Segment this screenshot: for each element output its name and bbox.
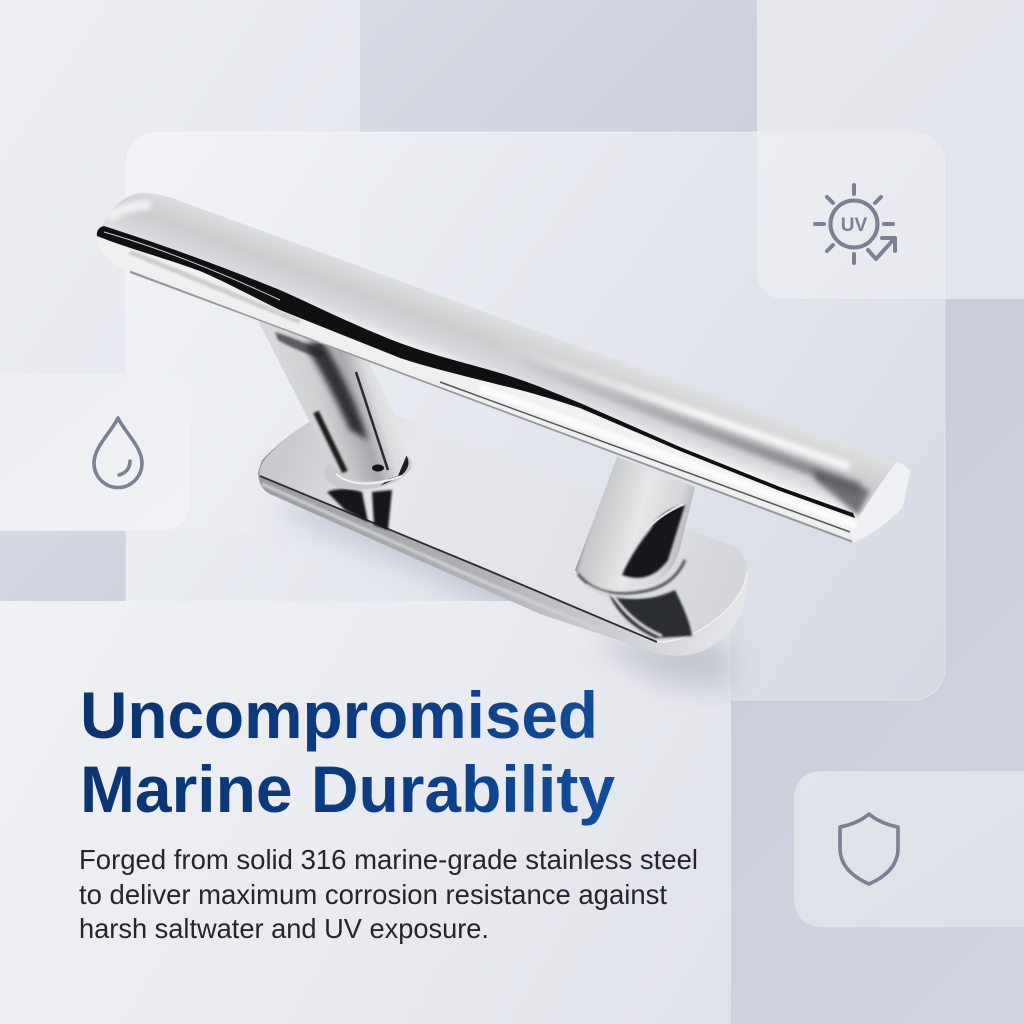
bar end cap <box>853 462 910 543</box>
body text <box>79 844 698 944</box>
title: Uncompromised <box>80 678 598 752</box>
body text: to deliver maximum corrosion resistance against <box>79 879 667 910</box>
panel: UV glass card <box>757 0 1024 299</box>
icon: water drop <box>94 418 142 488</box>
title: Marine Durability <box>80 752 615 826</box>
icon: shield <box>840 814 898 884</box>
plate shadow on centre panel <box>270 500 700 640</box>
panel: water card <box>0 374 190 530</box>
panel: main text card <box>0 601 731 1024</box>
product: stainless steel cleat <box>97 193 910 656</box>
cleat bar <box>97 193 910 543</box>
panel: centre glass <box>126 132 945 700</box>
cleat base plate <box>258 415 748 656</box>
body text: harsh saltwater and UV exposure. <box>79 913 489 944</box>
left post <box>255 315 414 495</box>
dark reflection band <box>97 226 855 518</box>
right post <box>575 457 695 597</box>
icon: UV sun with check arrow <box>815 185 895 263</box>
panel: top-left glass <box>0 0 360 531</box>
plate shadow on main card <box>590 640 730 690</box>
body text: Forged from solid 316 marine-grade stainless steel <box>79 844 698 875</box>
panel: shield card <box>794 771 1024 927</box>
icon: UV sun with check arrow: UV <box>841 215 868 236</box>
title <box>80 678 615 826</box>
